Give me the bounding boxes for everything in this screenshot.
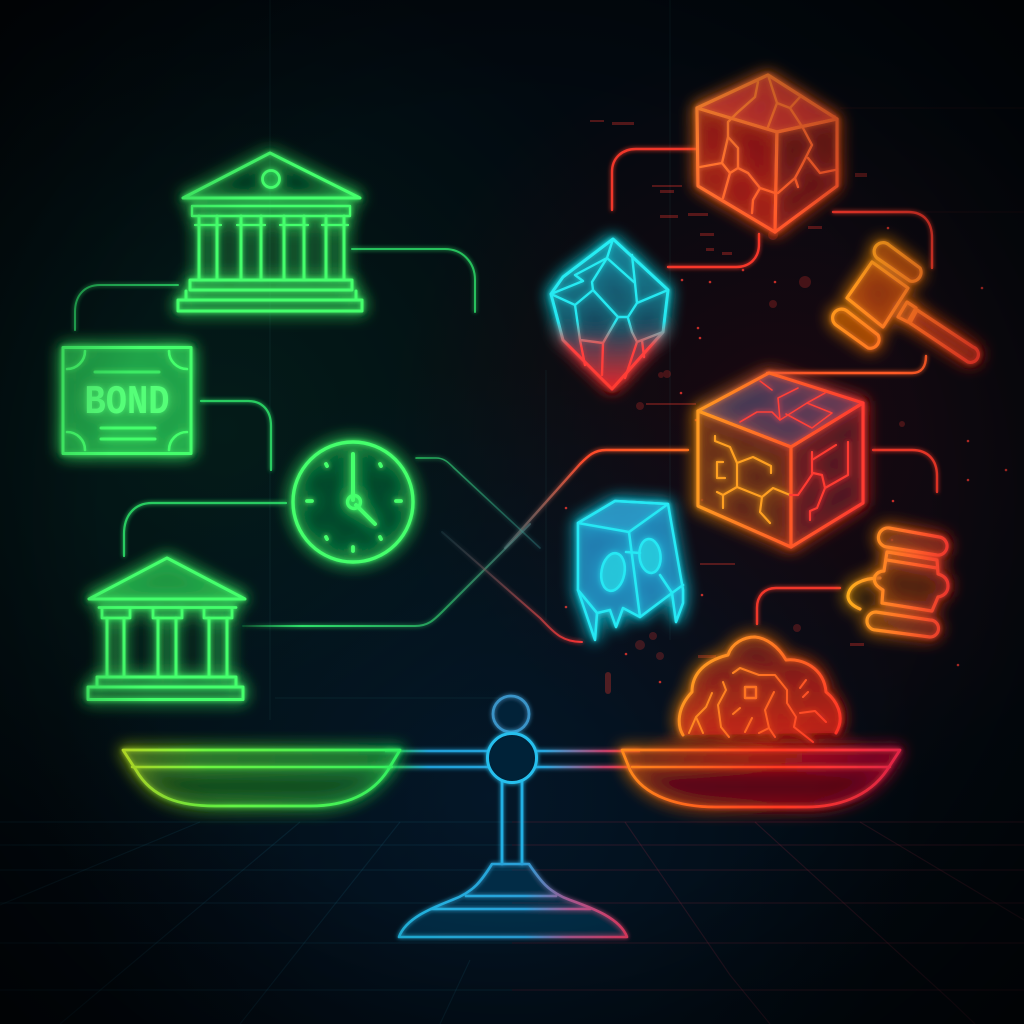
- ghost eyes: [598, 538, 662, 593]
- scale beam: [385, 751, 640, 767]
- bank emblem: [262, 170, 280, 188]
- bank pediment: [183, 153, 360, 198]
- crystal fractures: [551, 239, 668, 378]
- icon: lower bank: [88, 558, 245, 700]
- cube faces: [697, 75, 837, 232]
- connector: lower bank crossing to red cube: [243, 524, 530, 626]
- connector: cube crossing to centre: [505, 450, 688, 548]
- certificate frame: [63, 348, 191, 454]
- gavel neck: [898, 302, 916, 322]
- connector: clock to centre: [416, 458, 540, 548]
- scale pivot: [488, 734, 536, 782]
- gavel body: [847, 262, 908, 327]
- right face cracks: [790, 442, 848, 520]
- icon: bond certificate: [63, 348, 191, 454]
- ghost cube body: [578, 501, 683, 640]
- icon: top bank: [178, 153, 362, 311]
- icon: cracked cube top right: [697, 75, 837, 232]
- blob outline: [679, 637, 840, 735]
- bank steps: [178, 280, 362, 311]
- hour ticks: [307, 464, 401, 551]
- connector: top bank to right: [352, 249, 475, 312]
- floor grid: [0, 822, 1024, 1024]
- bank columns: [195, 216, 348, 280]
- gavel band: [887, 560, 937, 568]
- lower bank entablature: [99, 608, 236, 618]
- right pan: [622, 750, 900, 807]
- lower bank steps: [88, 677, 243, 700]
- ghost cube front edge: [578, 532, 683, 617]
- connector: bond to clock: [201, 401, 271, 470]
- red connectors: [612, 149, 937, 624]
- clock hands: [353, 454, 375, 524]
- lower bank pediment: [89, 558, 245, 599]
- top face cracks: [740, 381, 832, 428]
- left pan: [123, 750, 400, 806]
- clock face: [293, 442, 413, 562]
- scale pillar: [502, 781, 522, 864]
- icon: crystal: [551, 239, 668, 389]
- blob cracks: [689, 668, 826, 742]
- clock hub: [348, 496, 360, 508]
- centre cube faces: [698, 373, 863, 547]
- connector: centre to ghost cube: [442, 532, 582, 642]
- upper rule: [95, 370, 159, 374]
- gavel handle: [910, 310, 978, 362]
- balance scale: [123, 696, 900, 937]
- scale base: [399, 864, 627, 937]
- scale top knob: [493, 696, 529, 732]
- icon: melting ghost cube: [578, 501, 683, 640]
- connector: clock to lower bank: [124, 503, 286, 556]
- blob core: [745, 687, 756, 698]
- gavel cap upper: [874, 243, 921, 281]
- handle curl: [848, 578, 880, 609]
- scattered red particles: [565, 115, 1007, 694]
- lower cap: [867, 612, 938, 637]
- lower bank columns: [107, 618, 227, 677]
- upper cap: [878, 528, 947, 555]
- gavel body block: [874, 552, 948, 611]
- icon: clock: [293, 442, 413, 562]
- crystal outline: [551, 239, 668, 389]
- bank entablature: [192, 206, 350, 216]
- icon: cracked cube centre: [698, 373, 863, 547]
- icon: red blob: [679, 637, 840, 742]
- bond label: BOND: [84, 380, 170, 426]
- decorative corners: [67, 351, 187, 450]
- ghost cube top: [578, 501, 668, 532]
- cube cracks: [700, 75, 835, 213]
- lower rules: [101, 428, 155, 439]
- gavel cap lower: [833, 309, 879, 348]
- glow above right pan: [645, 718, 875, 778]
- connector: top bank to bond: [75, 285, 178, 330]
- left face cracks: [715, 436, 790, 523]
- icon: gavel lower: [848, 528, 948, 637]
- icon: gavel top: [833, 243, 978, 362]
